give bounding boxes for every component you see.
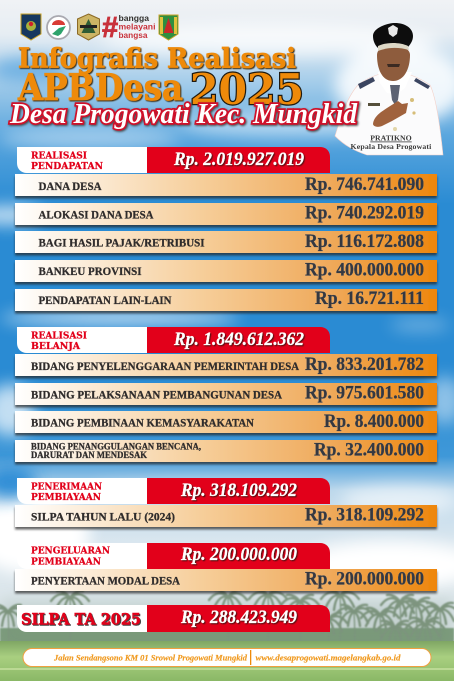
header: realisasi pendapatan: PENDAPATAN <box>31 161 103 172</box>
footer: address and website: www.desaprogowati.magelangkab.go.id <box>256 654 401 662</box>
panel: silpa ta 2025 <box>17 605 330 632</box>
header: realisasi belanja: BELANJA <box>31 341 81 352</box>
row: silpa tahun lalu <box>15 505 437 527</box>
row: pembinaan kemasyarakatan: BIDANG PEMBINAAN KEMASYARAKATAN <box>31 416 254 430</box>
header: pengeluaran pembiayaan: Rp. 200.000.000 <box>180 544 297 565</box>
logo: bangga melayani bangsa: # <box>102 12 118 44</box>
logo: bangga melayani bangsa <box>102 12 156 44</box>
label: silpa ta 2025: SILPA TA 2025 <box>21 610 141 628</box>
subtitle: Desa Progowati Kec. Mungkid <box>9 99 358 130</box>
row: pelaksanaan pembangunan desa <box>15 383 437 405</box>
row: dana desa <box>15 174 437 196</box>
portrait: village head in white uniform <box>335 23 443 155</box>
title year: 2025: 2025 <box>190 65 304 114</box>
row: alokasi dana desa: Rp. 740.292.019 <box>305 204 424 224</box>
row: penanggulangan bencana: Rp. 32.400.000 <box>314 440 424 460</box>
icon: magelang regency shield <box>159 15 178 40</box>
portrait caption: PRATIKNO <box>370 134 412 142</box>
footer: address and website <box>23 648 431 666</box>
title <box>17 44 296 109</box>
header: penerimaan pembiayaan: Rp. 318.109.292 <box>180 480 297 501</box>
row: penyertaan modal desa <box>15 569 437 591</box>
footer: address and website: Jalan Sendangsono KM 01 Srowol Progowati Mungkid <box>53 654 248 662</box>
row: pembinaan kemasyarakatan <box>15 411 437 433</box>
icon: round education logo <box>47 16 70 39</box>
row: penyelenggaraan pemerintah desa <box>15 354 437 376</box>
row: penyertaan modal desa: Rp. 200.000.000 <box>305 570 424 590</box>
header: penerimaan pembiayaan: PENERIMAAN <box>31 482 102 492</box>
row: alokasi dana desa: ALOKASI DANA DESA <box>38 208 154 222</box>
row: bagi hasil pajak/retribusi: BAGI HASIL PAJAK/RETRIBUSI <box>38 236 205 250</box>
logo: bangga melayani bangsa: bangsa <box>118 30 148 40</box>
logo row <box>21 12 178 44</box>
row: bankeu provinsi: Rp. 400.000.000 <box>305 260 424 280</box>
palms <box>0 589 454 676</box>
portrait caption <box>351 134 432 151</box>
row: bankeu provinsi: BANKEU PROVINSI <box>38 264 142 278</box>
row: penyelenggaraan pemerintah desa: Rp. 833.201.782 <box>305 355 424 375</box>
row: silpa tahun lalu: SILPA TAHUN LALU (2024) <box>31 510 175 524</box>
row: bagi hasil pajak/retribusi: Rp. 116.172.808 <box>305 232 424 252</box>
logo: bangga melayani bangsa: melayani <box>118 22 156 32</box>
header: realisasi belanja: Rp. 1.849.612.362 <box>173 329 304 350</box>
row: penanggulangan bencana: DARURAT DAN MENDESAK <box>31 451 148 461</box>
panel: realisasi pendapatan <box>15 147 437 311</box>
row: pendapatan lain-lain <box>15 289 437 311</box>
row: penyelenggaraan pemerintah desa: BIDANG PENYELENGGARAAN PEMERINTAH DESA <box>31 359 299 373</box>
portrait caption: Kepala Desa Progowati <box>351 142 432 151</box>
row: pendapatan lain-lain: PENDAPATAN LAIN-LAIN <box>38 293 172 307</box>
row: bagi hasil pajak/retribusi <box>15 231 437 253</box>
row: silpa tahun lalu: Rp. 318.109.292 <box>305 506 424 526</box>
logo: bangga melayani bangsa: bangga <box>118 13 149 23</box>
header: realisasi pendapatan: Rp. 2.019.927.019 <box>173 149 304 170</box>
icon: kemendagri shield <box>21 14 41 40</box>
header: pengeluaran pembiayaan: PENGELUARAN <box>31 546 110 556</box>
row: bankeu provinsi <box>15 260 437 282</box>
panel: realisasi belanja <box>15 327 437 462</box>
title line: APBDesa: APBDesa <box>17 67 183 109</box>
row: pembinaan kemasyarakatan: Rp. 8.400.000 <box>324 412 424 432</box>
header: pengeluaran pembiayaan: PEMBIAYAAN <box>31 556 101 568</box>
row: penanggulangan bencana: BIDANG PENANGGULANGAN BENCANA, <box>31 442 201 452</box>
header: penerimaan pembiayaan <box>17 478 330 504</box>
row: dana desa: DANA DESA <box>38 179 102 193</box>
panel: penerimaan pembiayaan <box>15 478 437 527</box>
title line: Infografis Realisasi: Infografis Realisasi <box>18 44 296 74</box>
panel: pengeluaran pembiayaan <box>15 543 437 591</box>
icon: central java crest <box>78 14 100 40</box>
row: pendapatan lain-lain: Rp. 16.721.111 <box>315 289 424 309</box>
row: penyertaan modal desa: PENYERTAAN MODAL DESA <box>31 574 180 588</box>
header: realisasi belanja: REALISASI <box>31 330 87 342</box>
row: pelaksanaan pembangunan desa: Rp. 975.601.580 <box>305 384 424 404</box>
row: dana desa: Rp. 746.741.090 <box>305 175 424 195</box>
row: penanggulangan bencana <box>15 440 437 462</box>
header: pengeluaran pembiayaan <box>17 543 330 569</box>
header: realisasi pendapatan <box>17 147 330 173</box>
header: penerimaan pembiayaan: PEMBIAYAAN <box>31 492 101 503</box>
row: alokasi dana desa <box>15 203 437 225</box>
value: silpa total: Rp. 288.423.949 <box>180 607 297 628</box>
header: realisasi pendapatan: REALISASI <box>31 150 87 162</box>
row: pelaksanaan pembangunan desa: BIDANG PELAKSANAAN PEMBANGUNAN DESA <box>31 388 282 402</box>
header: realisasi belanja <box>17 327 330 353</box>
